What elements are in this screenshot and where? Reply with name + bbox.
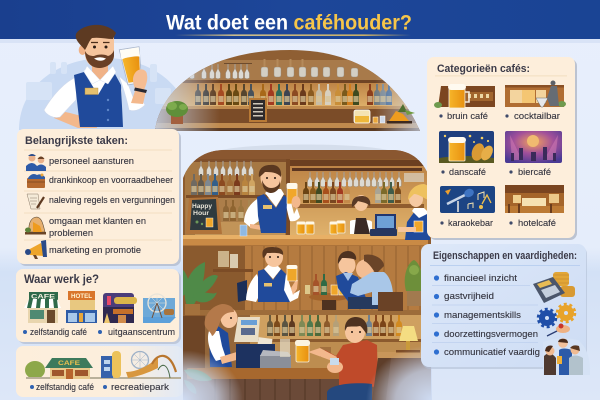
icon: hotel — [66, 291, 97, 323]
panel: waar werk je — [16, 269, 181, 344]
icon: team with beer — [543, 338, 590, 375]
plant left — [183, 262, 218, 315]
category: hotelcafé: hotelcafé — [518, 218, 556, 229]
glass of water — [240, 225, 247, 236]
icon: hand with pen — [547, 324, 570, 336]
chalkboard: Happy Hour: Hour — [193, 210, 209, 217]
head — [79, 45, 86, 55]
text: personeel: personeel aansturen — [49, 156, 134, 167]
upper counter — [183, 235, 428, 239]
skills list: communicatief vaardig — [444, 347, 540, 358]
top scene: bar shelves — [150, 48, 425, 133]
chalkboard: Happy Hour — [186, 197, 222, 234]
icon: building and ferris wheel — [101, 351, 158, 378]
upper-right bottles — [303, 182, 401, 203]
icon: café building: CAFE — [58, 360, 81, 367]
text: omgaan met klanten: omgaan met klanten en — [49, 216, 146, 227]
seated guests — [336, 251, 403, 311]
location labels: zelfstandig café — [36, 382, 94, 393]
back wall — [185, 162, 290, 236]
heading: Belangrijkste taken: — [25, 135, 128, 147]
waiter with beer — [237, 247, 300, 302]
category: hotelcafé — [505, 185, 564, 229]
right arm — [119, 76, 145, 111]
category: biercafé — [505, 131, 562, 178]
snack platter — [387, 104, 415, 124]
icon: document and pen — [27, 194, 44, 209]
beer glass — [119, 47, 145, 85]
icon: staff — [26, 154, 46, 171]
location labels: uitgaanscentrum — [108, 327, 175, 338]
lower bar wall — [185, 310, 430, 315]
hand and watch — [133, 69, 147, 90]
icon: gears — [538, 304, 575, 327]
location labels: recreatiepark — [111, 382, 169, 393]
blonde waitress — [398, 184, 432, 240]
icon: megaphone — [25, 240, 47, 259]
café owner with beer — [44, 25, 147, 128]
text: drankinkoop: drankinkoop en voorraadbeheer — [49, 175, 173, 186]
skills list: managementskills — [444, 310, 521, 321]
bottom fade — [183, 345, 432, 400]
skills list — [434, 273, 540, 358]
customer beer — [280, 339, 331, 362]
customer — [308, 317, 391, 400]
cash register — [370, 214, 397, 236]
top jars — [261, 59, 358, 77]
icon: rollercoaster — [152, 356, 176, 378]
category: karaokebar: karaokebar — [448, 218, 493, 229]
cashier woman — [205, 304, 261, 367]
beer mugs — [354, 110, 385, 123]
category: danscafé — [439, 131, 495, 178]
lower counter — [187, 368, 339, 379]
icon: café: CAFE — [31, 294, 56, 300]
beers on counter — [297, 220, 345, 234]
heading: Categorieën cafés: — [437, 63, 530, 75]
icon: café — [24, 292, 61, 323]
location labels: zelfstandig café — [30, 327, 87, 338]
category: bruin café: bruin café — [447, 111, 488, 122]
icon: café building — [45, 358, 93, 379]
backdrop behind café owner — [19, 58, 190, 130]
category: karaokebar — [440, 186, 495, 229]
location labels — [23, 327, 175, 338]
upper-left shelf items — [191, 161, 255, 221]
skills list: financieel inzicht — [444, 273, 517, 284]
icon: plant — [166, 101, 188, 124]
text: marketing: marketing en promotie — [49, 245, 141, 256]
panel: eigenschappen en vaardigheden — [421, 244, 590, 375]
bartender with beer — [244, 165, 300, 233]
upper-right hanging glasses — [308, 172, 424, 187]
skills list: gastvrijheid — [444, 291, 494, 302]
bottles — [195, 84, 392, 105]
icon: hotel: HOTEL — [71, 294, 92, 300]
neck and collar — [92, 62, 108, 80]
plant bottom-left — [184, 369, 212, 394]
category: danscafé: danscafé — [449, 167, 486, 178]
chalkboard: Happy Hour: Happy — [192, 203, 212, 210]
shirt — [80, 70, 122, 110]
central scene: café interior — [180, 144, 435, 400]
icon: fair — [143, 294, 176, 323]
text: naleving: naleving regels en vergunningen — [49, 195, 175, 206]
panel: categorieën cafés — [427, 57, 577, 240]
chalkboard — [249, 98, 267, 122]
hanging glasses — [190, 63, 252, 79]
category: cocktailbar — [505, 80, 566, 122]
table with drinks — [305, 274, 349, 310]
header banner — [0, 0, 600, 43]
category: cocktailbar: cocktailbar — [514, 111, 560, 122]
card terminal — [234, 317, 272, 347]
panel: belangrijkste taken — [17, 129, 181, 266]
icon: nightlife — [103, 293, 137, 323]
heading: Waar werk je? — [24, 272, 99, 286]
title: Wat doet een caféhouder? — [166, 10, 412, 34]
location labels — [30, 382, 169, 393]
icon: stock crate — [27, 174, 45, 188]
category: bruin café — [434, 84, 495, 122]
plant right — [405, 260, 422, 306]
under-counter panelling — [213, 246, 424, 310]
table lamp — [396, 326, 420, 352]
icon: tree — [25, 361, 181, 379]
cash drawer — [236, 344, 291, 368]
waitress at till — [350, 195, 372, 234]
panel: recreatie — [16, 346, 183, 397]
icon: customer care — [25, 217, 46, 234]
skills list: doorzettingsvermogen — [444, 329, 538, 340]
vest — [74, 72, 123, 127]
left arm — [54, 110, 97, 128]
text: problemen: problemen — [49, 228, 93, 239]
category: biercafé: biercafé — [518, 167, 551, 178]
icon: calculator and coins — [533, 272, 575, 303]
lower bottles — [267, 315, 402, 336]
